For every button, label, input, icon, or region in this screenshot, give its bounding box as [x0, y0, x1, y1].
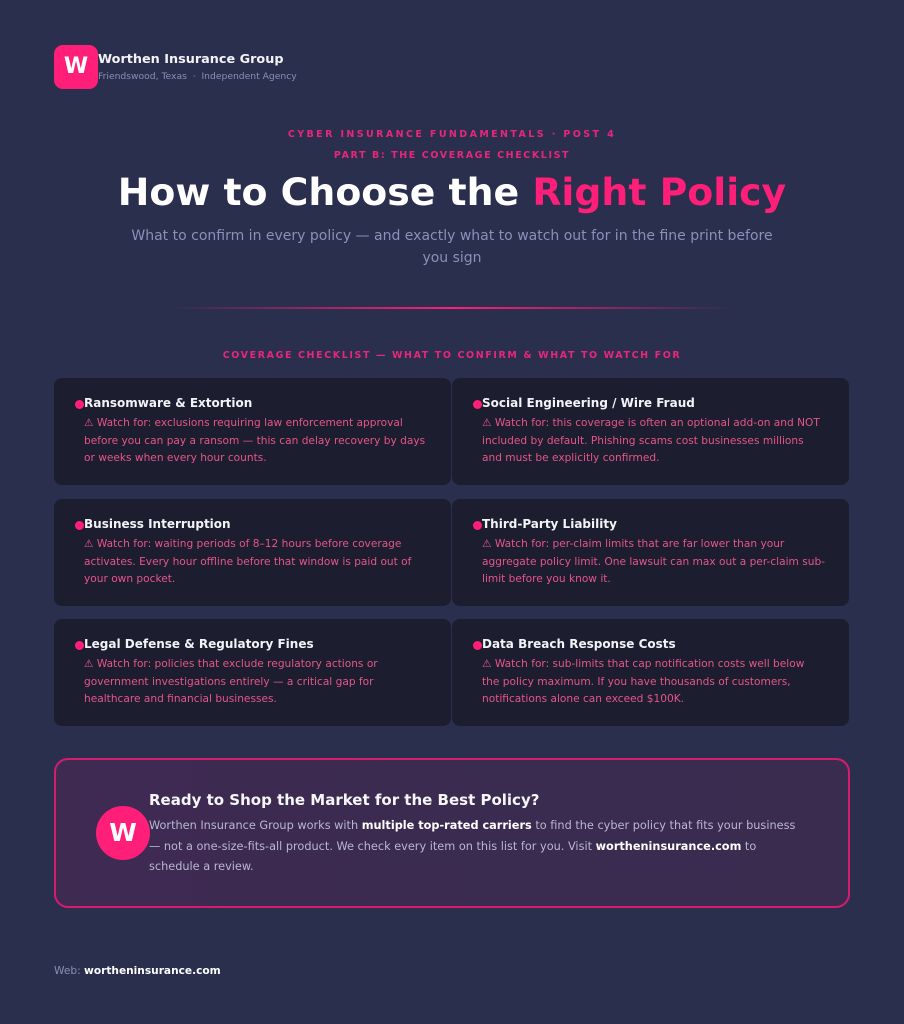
brand subtitle: Friendswood, Texas · Independent Agency: [98, 71, 297, 82]
card: business interruption: [54, 499, 451, 606]
card: data breach: ⚠ Watch for: sub-limits that cap notification costs well below the policy maximum. If you have thousands of customers, notifications alone can exceed $100K.: [482, 658, 804, 705]
footer: Web: wortheninsurance.com: [54, 965, 221, 977]
card: legal defense: [54, 619, 451, 726]
card: business interruption: Business Interruption: [84, 517, 231, 531]
subtitle: What to confirm in every policy — and exactly what to watch out for in the fine print before you sign: [131, 228, 773, 266]
card: data breach: Data Breach Response Costs: [482, 637, 676, 651]
eyebrow: CYBER INSURANCE FUNDAMENTALS · POST 4: [288, 129, 616, 140]
card: social engineering: ⚠ Watch for: this coverage is often an optional add-on and NOT included by default. Phishing scams cost businesses millions and must be explicitly confirmed.: [482, 417, 820, 464]
logo: W: [64, 54, 88, 79]
card: legal defense: Legal Defense & Regulatory Fines: [84, 637, 314, 651]
card: ransomware: [54, 378, 451, 485]
card: social engineering: [452, 378, 849, 485]
cta body: Worthen Insurance Group works with multiple top-rated carriers to find the cyber policy that fits your business — not a one-size-fits-all product. We check every item on this list for you. Visit wortheninsurance.com to schedule a review.: [149, 819, 795, 873]
logo: [54, 45, 98, 89]
card: third-party: ⚠ Watch for: per-claim limits that are far lower than your aggregate policy limit. One lawsuit can max out a per-claim sub-limit before you know it.: [482, 538, 825, 585]
card: third-party: Third-Party Liability: [482, 517, 617, 531]
cta icon: [96, 806, 150, 860]
card: third-party: [452, 499, 849, 606]
card: business interruption: ⚠ Watch for: waiting periods of 8–12 hours before coverage activates. Every hour offline before that window is paid out of your own pocket.: [84, 538, 411, 585]
brand name: Worthen Insurance Group: [98, 52, 284, 67]
card: ransomware: ⚠ Watch for: exclusions requiring law enforcement approval before you can pay a ransom — this can delay recovery by days or weeks when every hour counts.: [84, 417, 425, 464]
card: data breach: [452, 619, 849, 726]
card: social engineering: Social Engineering / Wire Fraud: [482, 396, 695, 410]
subeyebrow: PART B: THE COVERAGE CHECKLIST: [334, 150, 570, 161]
cta panel: [54, 758, 850, 908]
title: How to Choose the Right Policy: [118, 170, 786, 214]
card: ransomware: Ransomware & Extortion: [84, 396, 252, 410]
card: legal defense: ⚠ Watch for: policies that exclude regulatory actions or government investigations entirely — a critical gap for healthcare and financial businesses.: [84, 658, 378, 705]
cta icon: W: [109, 818, 137, 847]
cta title: Ready to Shop the Market for the Best Policy?: [149, 791, 539, 809]
section heading: COVERAGE CHECKLIST — WHAT TO CONFIRM & WHAT TO WATCH FOR: [223, 350, 681, 361]
